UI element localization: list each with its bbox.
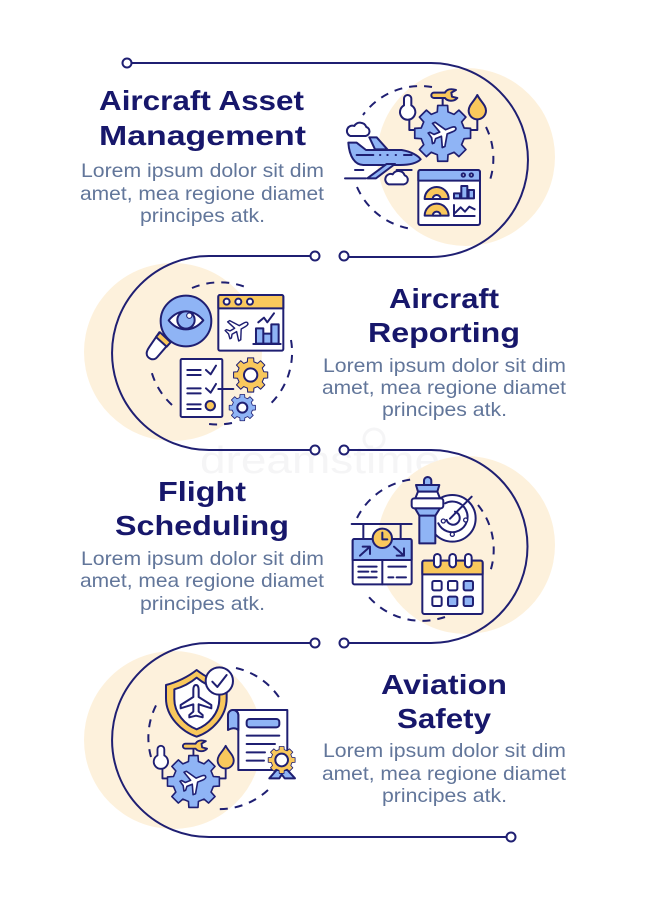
body text: principes atk.	[140, 205, 265, 227]
heading	[115, 476, 289, 541]
background circle	[377, 68, 555, 246]
watermark: dreamstime	[200, 440, 440, 482]
panel: aircraft asset management	[80, 58, 555, 260]
top node	[340, 446, 348, 454]
body text: Lorem ipsum dolor sit dim	[323, 740, 566, 762]
heading: Safety	[397, 703, 491, 734]
dashed ring	[151, 282, 292, 424]
heading: Reporting	[368, 317, 520, 348]
body text	[80, 160, 325, 227]
dashed ring	[148, 668, 282, 809]
body text: principes atk.	[140, 593, 265, 615]
panel: aircraft reporting	[84, 252, 567, 454]
body text: amet, mea regione diamet	[322, 377, 567, 399]
body text: amet, mea regione diamet	[80, 570, 325, 592]
body text: Lorem ipsum dolor sit dim	[323, 355, 566, 377]
background circle	[84, 263, 262, 441]
heading	[381, 669, 507, 734]
heading: Scheduling	[115, 510, 289, 541]
body text	[322, 355, 567, 421]
body text: principes atk.	[382, 785, 507, 807]
heading: Aviation	[381, 669, 507, 700]
heading: Aircraft	[389, 283, 499, 314]
panel: aviation safety	[84, 638, 567, 842]
panel: flight scheduling	[80, 446, 555, 648]
background circle	[377, 456, 555, 634]
watermark	[200, 429, 440, 482]
icon: safety shield, certificate and maintenance gear	[154, 667, 295, 807]
bottom node	[340, 638, 348, 648]
icon: plane and maintenance dashboard	[345, 89, 486, 225]
dashed ring	[357, 86, 493, 229]
icon: inspection and reports	[147, 295, 283, 421]
background circle	[84, 651, 262, 829]
dashed ring	[357, 479, 494, 621]
heading	[368, 283, 520, 348]
heading: Flight	[158, 476, 246, 507]
heading: Aircraft Asset	[99, 85, 304, 116]
body text	[80, 548, 325, 615]
end node	[340, 252, 348, 260]
body text: Lorem ipsum dolor sit dim	[81, 160, 324, 182]
connector line	[112, 256, 310, 450]
body text: principes atk.	[382, 399, 507, 421]
top node	[310, 252, 320, 260]
connector line	[349, 450, 528, 643]
bottom node	[310, 446, 320, 454]
body text	[322, 740, 567, 807]
connector line	[112, 643, 506, 837]
start node	[122, 58, 132, 68]
body text: Lorem ipsum dolor sit dim	[81, 548, 324, 570]
heading: Management	[99, 120, 306, 151]
body text: amet, mea regione diamet	[80, 183, 325, 205]
end node	[506, 832, 516, 842]
heading	[99, 85, 306, 151]
icon: control tower, departures board and calendar	[352, 477, 483, 614]
top node	[310, 638, 320, 648]
body text: amet, mea regione diamet	[322, 763, 567, 785]
connector line	[132, 63, 528, 257]
